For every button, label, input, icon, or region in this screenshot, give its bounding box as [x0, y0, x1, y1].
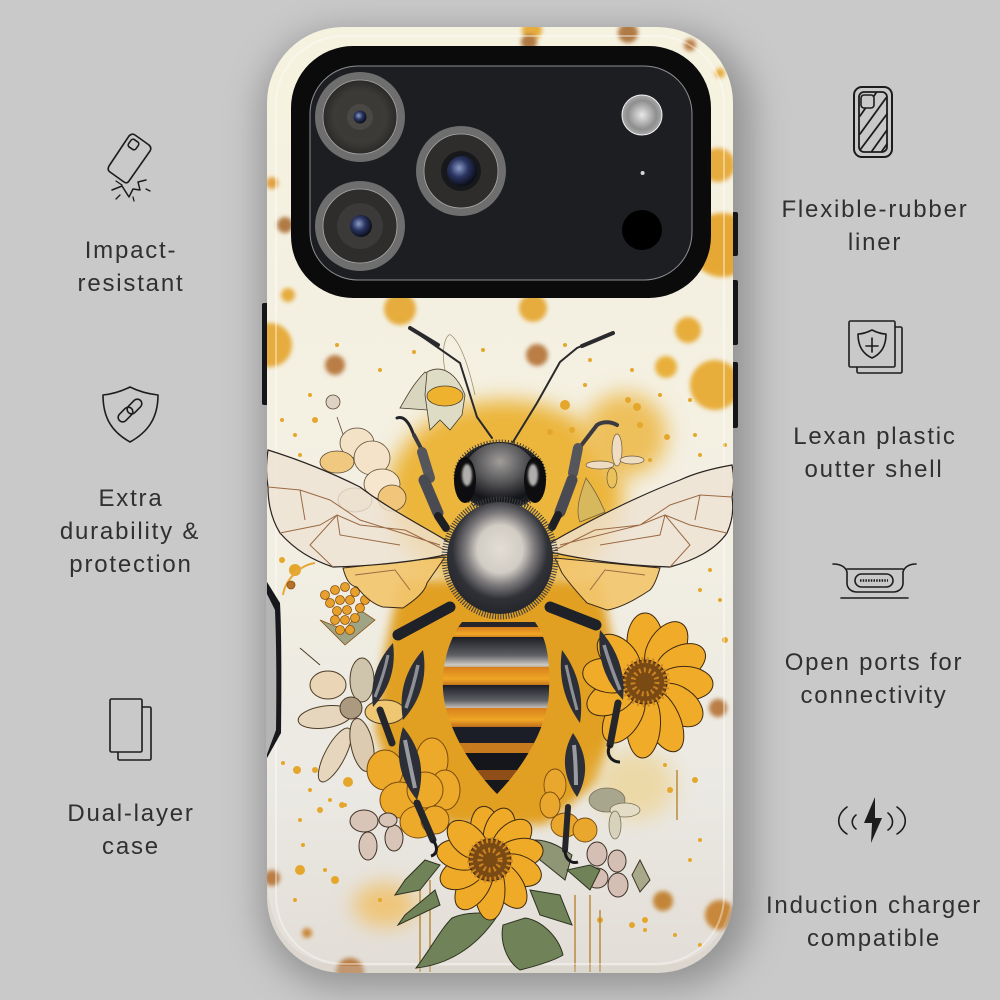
- camera plate: [310, 66, 692, 280]
- left side port notch: [266, 582, 281, 758]
- bottom sunflower: [434, 804, 546, 920]
- icon: usb port: [833, 564, 916, 598]
- icon: shell and shield: [849, 321, 902, 373]
- green leaves bottom: [395, 840, 600, 970]
- feature: impact resistant: [78, 134, 184, 297]
- icon: dropped phone: [108, 134, 151, 201]
- label: Extra: [98, 485, 164, 512]
- camera bump: [291, 46, 711, 298]
- small flower upper right: [578, 434, 644, 522]
- blurred paint spots: [248, 20, 754, 986]
- microphone dot: [641, 171, 645, 175]
- lidar sensor: [622, 210, 662, 250]
- label: protection: [69, 551, 193, 578]
- label: Open ports for: [785, 649, 963, 676]
- grey wilted flower right: [589, 788, 640, 839]
- left wing pair: [266, 450, 457, 608]
- feature: lexan shell: [793, 321, 957, 483]
- feature: flexible rubber liner: [781, 87, 969, 256]
- label: Impact-: [85, 237, 177, 264]
- paint drips: [420, 770, 677, 972]
- front legs: [397, 417, 617, 528]
- head: [454, 442, 546, 510]
- phone shadow: [262, 32, 752, 987]
- feature: induction charging: [766, 797, 982, 952]
- lens upper left: [315, 72, 405, 162]
- right lower wing: [555, 558, 660, 610]
- pale flower upper left: [320, 395, 406, 512]
- label: Lexan plastic: [793, 423, 957, 450]
- label: connectivity: [800, 682, 948, 709]
- right wing veins: [555, 495, 732, 590]
- lilac flower left: [350, 810, 403, 860]
- rim highlight: [276, 36, 724, 964]
- label: Induction charger: [766, 892, 982, 919]
- orange peony left: [367, 738, 460, 838]
- thorax: [446, 501, 554, 615]
- artwork clipped to case: [248, 20, 754, 986]
- left upper wing: [266, 450, 457, 567]
- feature: dual layer: [67, 699, 195, 860]
- abdomen: [442, 622, 550, 794]
- icon: shield with link: [103, 387, 158, 442]
- label: Dual-layer: [67, 800, 195, 827]
- bump frame: [291, 46, 711, 298]
- orange peony right: [540, 769, 597, 842]
- pale daisy left: [297, 648, 405, 786]
- amber wash behind bee: [353, 393, 675, 927]
- flash: [622, 95, 662, 135]
- phone case: [248, 20, 754, 986]
- icon: liner: [854, 87, 892, 157]
- label: compatible: [807, 925, 941, 952]
- case body: [267, 27, 733, 973]
- feature: open ports: [785, 564, 963, 709]
- label: Flexible-rubber: [781, 196, 969, 223]
- label: outter shell: [804, 456, 944, 483]
- hanging bell flower: [400, 335, 475, 430]
- side buttons: [262, 212, 738, 428]
- label: durability &: [60, 518, 200, 545]
- bee: [372, 328, 624, 862]
- left lower wing: [343, 557, 445, 608]
- berry cluster left: [283, 563, 375, 645]
- label: case: [102, 833, 160, 860]
- left wing veins: [268, 487, 445, 590]
- feature: extra durability: [60, 387, 200, 578]
- right wing pair: [550, 465, 734, 610]
- right sunflower: [580, 613, 714, 759]
- icon: two layers: [110, 699, 151, 760]
- lens centre: [416, 126, 506, 216]
- label: liner: [848, 229, 902, 256]
- flowers: [283, 335, 714, 970]
- bottom case shading: [267, 880, 733, 980]
- middle and rear legs: [372, 607, 624, 862]
- lens lower left: [315, 181, 405, 271]
- label: resistant: [78, 270, 184, 297]
- antennae: [410, 328, 613, 442]
- icon: wireless bolt: [839, 797, 905, 843]
- ink splatter: [279, 343, 728, 947]
- right upper wing: [550, 465, 734, 567]
- lilac flower right: [586, 842, 650, 897]
